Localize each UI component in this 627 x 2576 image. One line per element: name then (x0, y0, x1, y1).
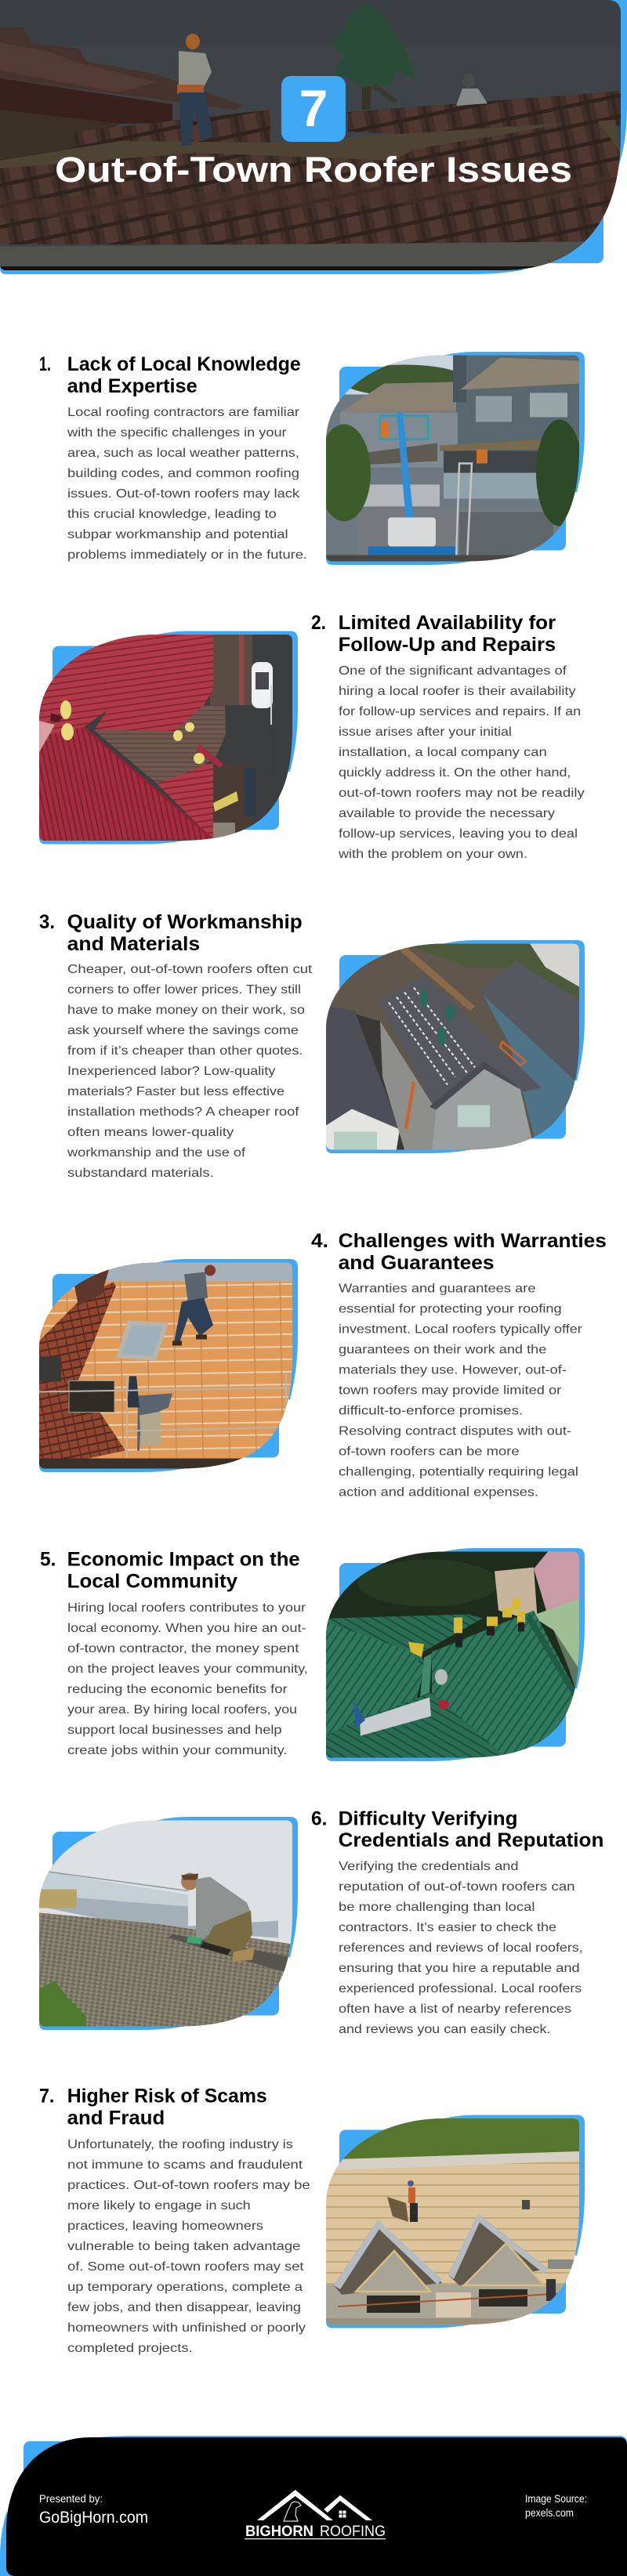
photo 5: green metal roof with workers (326, 1548, 585, 1761)
panel: issue 3 (39, 911, 585, 1180)
body text 1: problems immediately or in the future. (67, 548, 307, 562)
number badge (281, 76, 346, 142)
logo: Bighorn Roofing (245, 2490, 386, 2540)
body text 2: with the problem on your own. (338, 848, 527, 861)
hero: roofer kneeling (456, 74, 487, 106)
body text 1: subpar workmanship and potential (67, 528, 288, 541)
panel: issue 5 (40, 1548, 585, 1761)
heading 3: 3. (39, 911, 55, 933)
panel: issue 1 (39, 352, 585, 565)
body text 6: contractors. It’s easier to check the (339, 1921, 556, 1934)
body text 6: experienced professional. Local roofers (339, 1982, 582, 1995)
presented by: GoBigHorn.com (39, 2509, 148, 2527)
body text 7: completed projects. (67, 2342, 193, 2355)
body text 3: substandard materials. (67, 1167, 214, 1180)
body text 4: town roofers may provide limited or (339, 1384, 562, 1398)
body text 1: with the specific challenges in your (67, 426, 287, 440)
body text 2 (338, 664, 585, 861)
body text 3: often means lower-quality (67, 1126, 234, 1139)
heading 2: Limited Availability for (339, 612, 556, 634)
number badge: 7 (299, 79, 328, 137)
body text 6: reputation of out-of-town roofers can (339, 1880, 575, 1894)
heading 4: and Guarantees (339, 1252, 494, 1274)
hero blue backing (0, 0, 627, 274)
body text 1: Local roofing contractors are familiar (67, 406, 300, 419)
body text 4: Resolving contract disputes with out- (339, 1424, 571, 1438)
body text 5: reducing the economic benefits for (67, 1683, 288, 1696)
body text 4: guarantees on their work and the (339, 1343, 546, 1357)
panel: issue 6 (39, 1808, 603, 2036)
body text 3: ask yourself where the savings come (67, 1024, 299, 1037)
heading 4: Challenges with Warranties (339, 1230, 607, 1252)
heading 2: 2. (311, 612, 326, 634)
hero banner (0, 0, 627, 274)
heading 4 (311, 1230, 607, 1274)
body text 3: materials? Faster but less effective (67, 1085, 285, 1098)
body text 7: vulnerable to being taken advantage (67, 2240, 301, 2253)
body text 3: workmanship and the use of (67, 1146, 246, 1160)
body text 3 (67, 963, 313, 1180)
heading 7 (39, 2086, 267, 2129)
hero photo: roofers on tile roof (0, 0, 627, 271)
hero: palm tree (331, 4, 415, 110)
body text 7: few jobs, and then disappear, leaving (67, 2301, 301, 2314)
heading 5 (40, 1548, 300, 1592)
body text 7: practices. Out-of-town roofers may be (67, 2179, 310, 2192)
body text 7: up temporary operations, complete a (67, 2281, 303, 2294)
presented by (39, 2492, 148, 2527)
image source: Image Source: (525, 2493, 587, 2505)
body text 7: not immune to scams and fraudulent (67, 2158, 303, 2172)
body text 5 (67, 1601, 308, 1757)
heading 6: 6. (311, 1808, 327, 1830)
body text 2: available to provide the necessary (339, 807, 555, 820)
body text 3: installation methods? A cheaper roof (67, 1105, 299, 1119)
body text 2: One of the significant advantages of (339, 664, 567, 678)
body text 5: your area. By hiring local roofers, you (67, 1703, 297, 1717)
body text 4 (339, 1282, 582, 1500)
hero: roofer standing (177, 34, 213, 146)
heading 7: Higher Risk of Scams (67, 2086, 267, 2107)
heading 1: and Expertise (67, 375, 198, 397)
heading 2 (311, 612, 556, 656)
panel: issue 4 (39, 1230, 607, 1500)
heading 7: and Fraud (67, 2107, 165, 2129)
footer black panel (6, 2437, 627, 2576)
body text 3: have to make money on their work, so (67, 1004, 305, 1017)
body text 5: of-town contractor, the money spent (67, 1642, 299, 1655)
body text 4: challenging, potentially requiring legal (339, 1465, 578, 1479)
body text 6 (339, 1860, 583, 2036)
body text 2: installation, a local company can (339, 746, 547, 759)
panel: issue 7 (39, 2086, 585, 2355)
photo 1: lift and townhouse (317, 352, 585, 565)
heading 6 (311, 1808, 603, 1851)
body text 2: follow-up services, leaving you to deal (339, 827, 578, 841)
logo: Bighorn Roofing: BIGHORN (245, 2524, 314, 2540)
heading 7: 7. (39, 2086, 54, 2107)
body text 4: materials they use. However, out-of- (339, 1363, 567, 1377)
body text 4: of-town roofers can be more (339, 1445, 520, 1459)
photo 2: red metal roof from above (39, 631, 298, 845)
panel: issue 2 (39, 612, 585, 861)
body text 1 (67, 406, 307, 562)
body text 2: for follow-up services and repairs. If an (339, 705, 581, 718)
body text 5: support local businesses and help (67, 1724, 282, 1737)
body text 7: more likely to engage in such (67, 2199, 251, 2212)
body text 7: homeowners with unfinished or poorly (67, 2321, 306, 2335)
body text 4: essential for protecting your roofing (339, 1302, 562, 1316)
body text 2: issue arises after your initial (339, 725, 512, 739)
heading 4: 4. (311, 1230, 328, 1252)
heading 6: Difficulty Verifying (339, 1808, 518, 1830)
image source: pexels.com (525, 2507, 574, 2519)
body text 7: Unfortunately, the roofing industry is (67, 2138, 293, 2151)
heading 1 (39, 353, 301, 397)
body text 6: often have a list of nearby references (339, 2003, 571, 2016)
body text 5: local economy. When you hire an out- (67, 1622, 306, 1635)
body text 2: hiring a local roofer is their availability (339, 685, 576, 698)
body text 5: Hiring local roofers contributes to your (67, 1601, 306, 1615)
footer blue backing (0, 2436, 627, 2576)
heading 3 (39, 911, 303, 955)
title: Out-of-Town Roofer Issues (55, 150, 572, 190)
heading 3: Quality of Workmanship (67, 911, 303, 933)
heading 2: Follow-Up and Repairs (339, 634, 556, 656)
heading 5: Economic Impact on the (67, 1548, 300, 1570)
heading 6: Credentials and Reputation (339, 1829, 603, 1851)
body text 6: references and reviews of local roofers, (339, 1941, 583, 1955)
body text 6: Verifying the credentials and (339, 1860, 519, 1873)
photo 6: roofer kneeling on shingles (39, 1817, 298, 2030)
heading 1: Lack of Local Knowledge (67, 353, 301, 375)
photo 3: aerial gray shingle house (326, 940, 585, 1153)
heading 5: 5. (40, 1548, 56, 1570)
body text 4: Warranties and guarantees are (339, 1282, 536, 1296)
heading 5: Local Community (67, 1570, 237, 1592)
photo 7: timber roof with twin gables (326, 2115, 585, 2328)
logo: Bighorn Roofing: ROOFING (320, 2524, 386, 2540)
body text 6: be more challenging than local (339, 1901, 535, 1914)
heading 1: 1. (39, 353, 51, 375)
body text 1: area, such as local weather patterns, (67, 447, 299, 460)
body text 4: investment. Local roofers typically offer (339, 1322, 582, 1337)
body text 3: corners to offer lower prices. They still (67, 983, 301, 997)
body text 7: practices, leaving homeowners (67, 2220, 263, 2233)
body text 2: quickly address it. On the other hand, (339, 766, 571, 780)
body text 2: out-of-town roofers may not be readily (339, 787, 585, 800)
body text 4: action and additional expenses. (339, 1485, 538, 1500)
body text 1: this crucial knowledge, leading to (67, 508, 277, 521)
body text 7: of. Some out-of-town roofers may set (67, 2260, 304, 2274)
body text 4: difficult-to-enforce promises. (339, 1404, 523, 1418)
body text 6: ensuring that you hire a reputable and (339, 1962, 580, 1975)
body text 3: from if it’s cheaper than other quotes. (67, 1044, 303, 1058)
footer (0, 2436, 627, 2576)
body text 3: Inexperienced labor? Low-quality (67, 1065, 275, 1078)
body text 5: create jobs within your community. (67, 1744, 288, 1757)
body text 1: building codes, and common roofing (67, 467, 299, 480)
heading 3: and Materials (67, 933, 200, 955)
photo 4: roofers on orange underlayment (39, 1259, 298, 1472)
body text 7 (67, 2138, 310, 2355)
body text 3: Cheaper, out-of-town roofers often cut (67, 963, 313, 976)
body text 6: and reviews you can easily check. (339, 2023, 550, 2036)
presented by: Presented by: (39, 2492, 103, 2505)
body text 5: on the project leaves your community, (67, 1662, 308, 1676)
body text 1: issues. Out-of-town roofers may lack (67, 487, 300, 501)
image source (525, 2493, 587, 2519)
